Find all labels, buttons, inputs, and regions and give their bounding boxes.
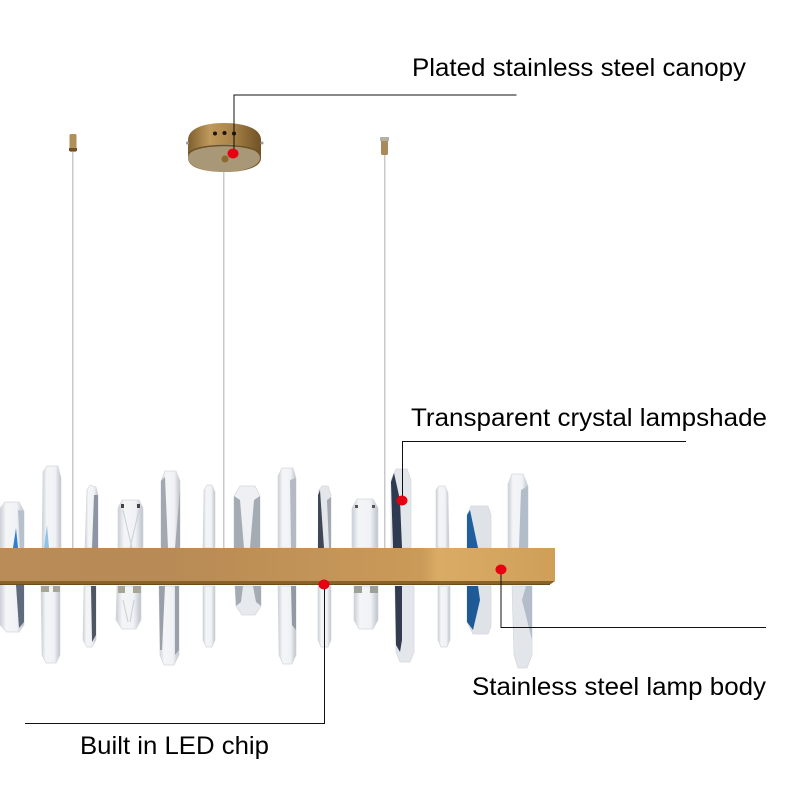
crystal 11	[391, 469, 414, 662]
lamp body bar	[0, 548, 555, 585]
crystal 1	[0, 502, 24, 632]
callout: crystal lampshade: Transparent crystal lampshade	[411, 404, 767, 432]
crystal 9	[318, 486, 331, 647]
callout: canopy	[228, 54, 747, 158]
crystal 8	[278, 468, 296, 664]
cable grip left	[69, 134, 77, 152]
callout: LED chip: Built in LED chip	[80, 732, 269, 760]
callout: lamp body	[472, 564, 767, 701]
callout: canopy: Plated stainless steel canopy	[412, 54, 747, 82]
crystal 5	[159, 471, 180, 665]
crystal 6	[203, 485, 215, 647]
ceiling canopy	[186, 123, 264, 172]
callout: LED chip	[25, 580, 330, 760]
crystal row	[0, 466, 532, 668]
cable grip right	[380, 137, 389, 155]
crystal 2	[41, 466, 61, 663]
crystal 7	[234, 486, 261, 615]
suspension cables	[72, 152, 386, 548]
crystal 10	[352, 499, 378, 629]
crystal 14	[508, 474, 532, 668]
crystal 3	[83, 485, 98, 647]
crystal 4	[116, 500, 143, 629]
callout: lamp body: Stainless steel lamp body	[472, 673, 767, 701]
crystal 13	[467, 506, 491, 634]
callout: crystal lampshade	[396, 404, 767, 506]
crystal 12	[436, 486, 450, 647]
